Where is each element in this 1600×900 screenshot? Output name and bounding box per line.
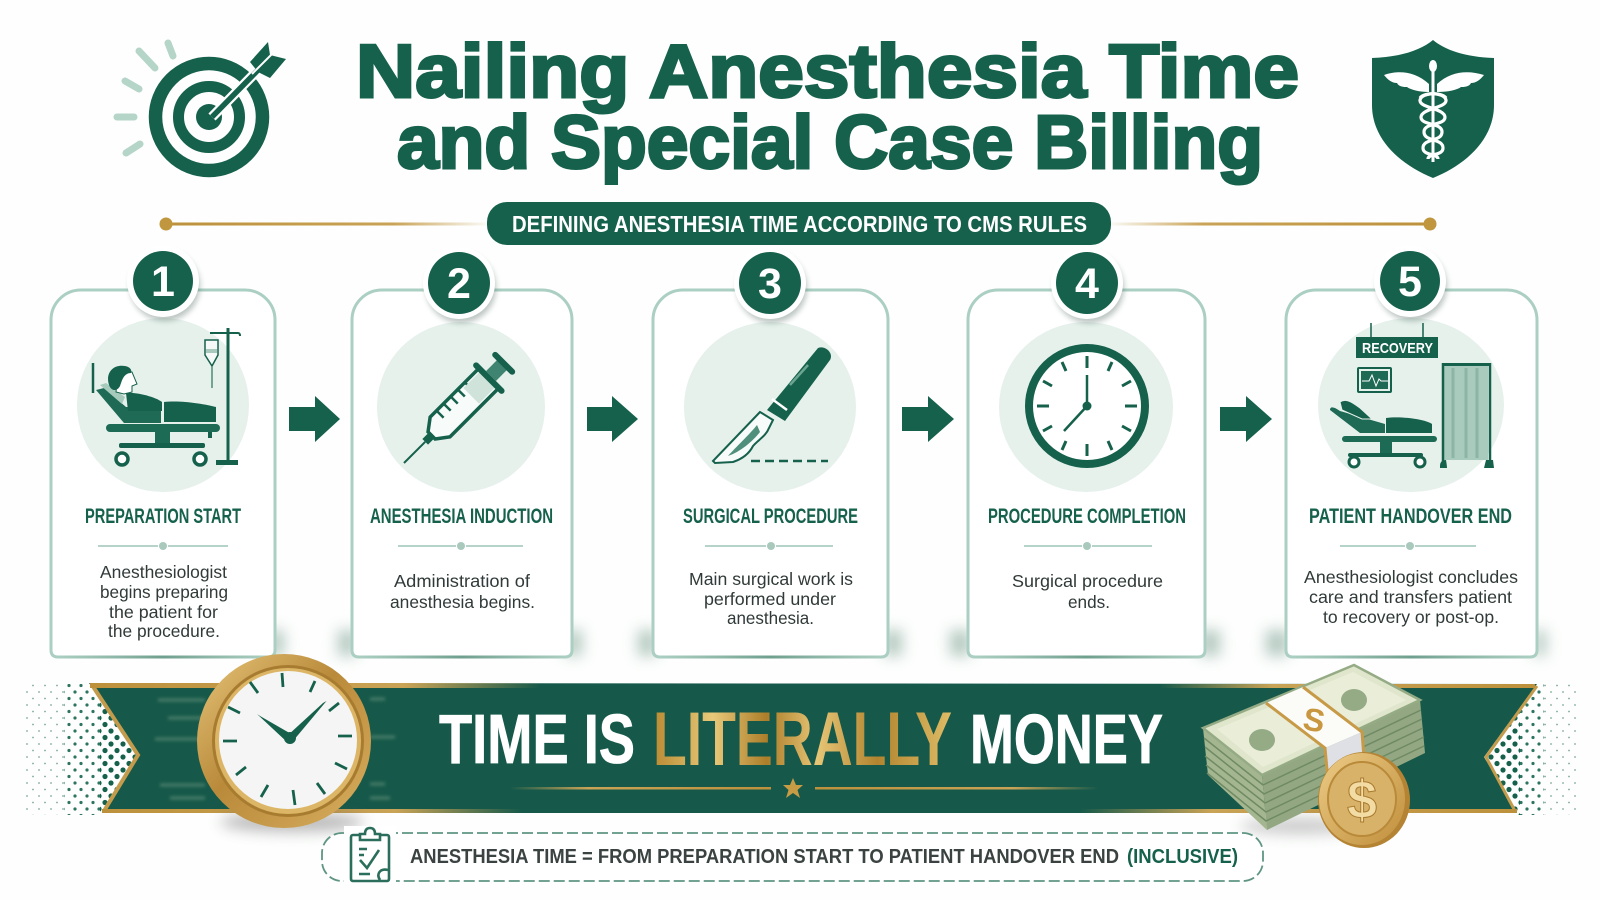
heading: PROCEDURE COMPLETION [988,505,1186,528]
arrow 4 to 5 [1220,396,1272,442]
description [100,562,228,641]
arrow 3 to 4 [902,396,954,442]
subtitle pill: DEFINING ANESTHESIA TIME ACCORDING TO CMS RULES [512,211,1087,237]
description: care and transfers patient [1309,587,1512,607]
description: the procedure. [108,621,220,641]
icon: target with arrow [117,42,286,170]
header rule [160,218,1436,230]
badge 5 [1374,245,1447,321]
icon: scalpel [684,322,856,492]
divider [398,542,523,550]
heading: PREPARATION START [85,505,241,528]
card shadows [268,630,1546,656]
halftone dots right [1484,684,1580,816]
description: performed under [704,589,836,609]
icon: syringe [377,322,545,492]
title [356,29,1299,184]
description: Administration of [394,571,530,591]
description: anesthesia. [727,608,814,628]
title: and Special Case Billing [397,100,1263,184]
badge 1: 1 [151,258,175,306]
icon: caduceus shield [1372,40,1494,178]
formula callout [322,826,1263,884]
arrow 2 to 3 [587,396,638,442]
heading: PATIENT HANDOVER END [1309,505,1512,528]
subtitle pill [487,202,1111,245]
banner headline: TIME IS [439,700,635,778]
panel: step 2 anesthesia induction [352,290,572,658]
icon: recovery room [1318,318,1504,492]
icon: clipboard [351,828,389,881]
divider [705,542,833,550]
description [1012,571,1163,612]
badge 2 [423,247,496,323]
description: Anesthesiologist [100,562,227,582]
divider [98,542,228,550]
heading: SURGICAL PROCEDURE [683,505,858,528]
gold wall clock [197,654,371,832]
description: ends. [1068,592,1110,612]
panel: step 3 surgical procedure [653,290,888,658]
badge 3 [734,247,807,323]
badge 1 [127,245,200,321]
banner ribbon [89,683,1537,813]
inclusive note: (INCLUSIVE) [1127,846,1238,868]
description: begins preparing [100,582,228,602]
money stack and coin: S [1300,700,1328,740]
arrow 1 to 2 [289,396,340,442]
description: anesthesia begins. [390,592,535,612]
description [1304,567,1518,627]
description: to recovery or post-op. [1323,607,1499,627]
title: Nailing Anesthesia Time [356,29,1299,113]
description: Surgical procedure [1012,571,1163,591]
icon: wall clock [999,322,1173,492]
formula text: ANESTHESIA TIME = FROM PREPARATION START TO PATIENT HANDOVER END [410,846,1119,868]
step number badges [127,245,1447,323]
badge 2: 2 [447,260,471,308]
panel: step 5 patient handover end [1286,290,1537,658]
banner headline: LITERALLY [653,697,952,782]
description [689,569,853,628]
description: Main surgical work is [689,569,853,589]
icon: patient on bed with IV [77,318,249,492]
badge 4 [1051,247,1124,323]
banner rule with star [510,778,1098,798]
badge 5: 5 [1398,258,1422,306]
icon: recovery room: RECOVERY [1362,340,1433,357]
badge 4: 4 [1075,260,1099,308]
divider [1024,542,1152,550]
divider [1340,542,1476,550]
panel: step 4 procedure completion [968,290,1205,658]
money stack and coin [1203,665,1425,848]
heading: ANESTHESIA INDUCTION [370,505,553,528]
halftone dots left [22,684,140,816]
badge 3: 3 [758,260,782,308]
banner headline: MONEY [970,700,1163,778]
banner headline [439,697,1163,782]
description: Anesthesiologist concludes [1304,567,1518,587]
description [390,571,535,612]
coin: $ [1347,770,1377,830]
panel: step 1 preparation start [51,290,275,658]
coin [1318,752,1410,848]
description: the patient for [109,602,218,622]
